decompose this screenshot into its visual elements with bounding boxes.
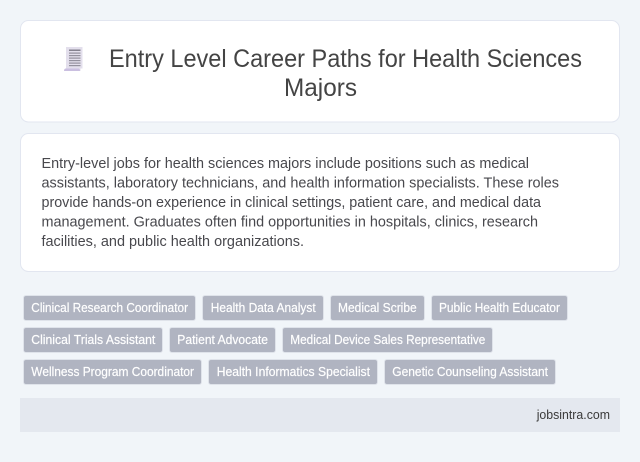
text block: description: provide hands-on experience in clinical settings, patient care, and medical data	[42, 195, 541, 211]
tag: Patient Advocate: Patient Advocate	[177, 333, 268, 347]
tag: Medical Scribe: Medical Scribe	[338, 301, 417, 315]
title	[109, 45, 582, 102]
tag: Medical Scribe	[330, 296, 424, 320]
tag: Public Health Educator: Public Health Educator	[439, 301, 560, 315]
title: Majors	[284, 74, 357, 102]
tag: Patient Advocate	[170, 328, 276, 352]
text block: description	[42, 156, 559, 250]
tag: Genetic Counseling Assistant: Genetic Counseling Assistant	[392, 365, 548, 379]
tag: Clinical Research Coordinator: Clinical Research Coordinator	[31, 301, 188, 315]
panel: title card	[20, 20, 620, 122]
text block: description: assistants, laboratory technicians, and health information specialists. These roles	[42, 176, 559, 192]
text block: description: management. Graduates often find opportunities in hospitals, clinics, research	[42, 214, 538, 230]
footer bar	[20, 398, 620, 432]
tag: Wellness Program Coordinator	[24, 360, 202, 384]
tag: Public Health Educator	[432, 296, 568, 320]
tag: Clinical Trials Assistant	[24, 328, 162, 352]
panel: description	[20, 134, 620, 272]
text block: description: Entry-level jobs for health sciences majors include positions such as medical	[42, 156, 529, 172]
footer source text: jobsintra.com	[536, 408, 610, 422]
icon: paper scroll	[64, 47, 82, 71]
tag: Health Data Analyst	[202, 296, 324, 320]
tag: Health Data Analyst: Health Data Analyst	[211, 301, 316, 315]
tag: Wellness Program Coordinator: Wellness Program Coordinator	[31, 365, 194, 379]
tag: Medical Device Sales Representative: Medical Device Sales Representative	[290, 333, 485, 347]
text block: description: facilities, and public health organizations.	[42, 234, 304, 250]
title: Entry Level Career Paths for Health Sciences	[109, 45, 582, 73]
tag: Clinical Research Coordinator	[24, 296, 196, 320]
tag: Clinical Trials Assistant: Clinical Trials Assistant	[31, 333, 156, 347]
tag list	[24, 296, 568, 384]
tag: Health Informatics Specialist: Health Informatics Specialist	[217, 365, 370, 379]
tag: Genetic Counseling Assistant	[384, 360, 556, 384]
tag: Medical Device Sales Representative	[282, 328, 492, 352]
tag: Health Informatics Specialist	[208, 360, 378, 384]
